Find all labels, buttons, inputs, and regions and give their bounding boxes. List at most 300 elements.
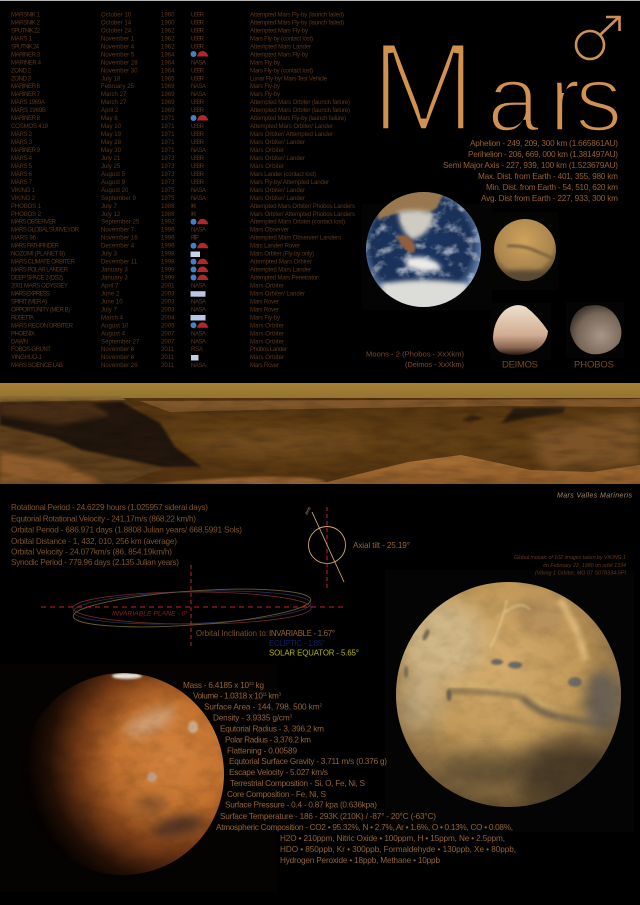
column: agencies: NASA bbox=[191, 91, 207, 98]
column: launch years: 1988 bbox=[161, 203, 175, 210]
stat: atmospheric composition: HDO • 850ppb, Kr • 300ppb, Formaldehyde • 130ppb, Xe • 80ppb, bbox=[280, 845, 516, 854]
column: mission names: FOBOS-GRUNT bbox=[11, 346, 51, 353]
column: mission names: ZOND 3 bbox=[11, 75, 32, 82]
column: mission results: Mars Orbiter bbox=[250, 163, 284, 170]
column: launch dates: May 8 bbox=[101, 115, 118, 122]
column: launch years bbox=[161, 12, 175, 369]
column: launch dates: March 27 bbox=[101, 91, 127, 98]
column: mission names: DAWN bbox=[11, 338, 28, 345]
icon: NASA and JPL logos, Mars Climate Orbiter bbox=[190, 259, 208, 265]
column: mission results: Mars Fly-by bbox=[250, 91, 281, 98]
column: mission results: Attempted Mars Orbiter (launch failure) bbox=[250, 107, 350, 114]
column: mission names: VIKING 1 bbox=[11, 187, 36, 194]
label: Phobos: PHOBOS bbox=[574, 360, 614, 370]
column: mission results: Attempted Mars Penetrator bbox=[250, 274, 318, 282]
column: mission results: Mars Orbiter bbox=[250, 322, 284, 329]
column: agencies: NASA bbox=[191, 362, 207, 369]
column: launch dates: July 18 bbox=[101, 75, 121, 82]
column: launch years: 1969 bbox=[161, 99, 175, 106]
column: launch dates: September 25 bbox=[101, 219, 140, 226]
text block: orbital distances: Aphelion - 249, 209, 300 km (1.665861AU) bbox=[470, 139, 618, 148]
column: launch dates: July 7 bbox=[101, 306, 118, 313]
column: mission results: Attempted Mars Orbiter bbox=[250, 259, 312, 266]
column: mission results: Mars Orbiter/ Lander bbox=[250, 139, 305, 146]
icon: Mars symbol bbox=[576, 17, 620, 59]
column: mission results: Mars Fly-by (contact lost) bbox=[250, 35, 313, 42]
column: mission results: Attempted Mars Fly-by bbox=[250, 27, 309, 34]
column: mission results: Attempted Mars Orbiter/ Lander bbox=[250, 123, 333, 130]
label: invariable plane: INVARIABLE PLANE - 0° bbox=[112, 610, 188, 618]
column: mission names: MARSNIK 2 bbox=[11, 20, 41, 26]
column: mission results: Mars Observer bbox=[250, 227, 289, 234]
column: mission names: MARINER 4 bbox=[11, 59, 42, 66]
column: launch dates: June 10 bbox=[101, 298, 123, 305]
chart: axial tilt bbox=[303, 505, 346, 588]
icon: NASA and JPL logos, Mariner 8 bbox=[190, 115, 208, 121]
column: mission names: MARS 1969A bbox=[11, 99, 46, 106]
column: agencies: NASA bbox=[191, 306, 207, 313]
column: mission results: Mars Orbiter/ Attempted Lander bbox=[250, 131, 333, 138]
image: Earth bbox=[366, 192, 481, 307]
column: launch dates: April 7 bbox=[101, 282, 119, 290]
column: mission names: MARS 7 bbox=[11, 179, 33, 186]
column: launch years: 2007 bbox=[161, 338, 175, 345]
text: number of moons: Moons - 2 (Phobos - XxXkm) bbox=[366, 350, 464, 358]
column: agencies: NASA bbox=[191, 227, 207, 234]
stat: surface pressure: Surface Pressure - 0.4 - 0.87 kpa (0.636kpa) bbox=[225, 801, 377, 810]
column: agencies: USSR bbox=[191, 35, 205, 42]
column: agencies: USSR bbox=[191, 107, 205, 114]
column: mission results: Attempted Mars Lander bbox=[250, 43, 311, 50]
text: number of moons: (Deimos - XxXkm) bbox=[405, 360, 464, 369]
image: panorama of crater bbox=[0, 383, 640, 484]
column: launch years: 2011 bbox=[161, 354, 175, 361]
column: launch years: 2007 bbox=[161, 330, 175, 337]
column: mission names: 2001 MARS ODYSSEY bbox=[11, 282, 68, 290]
column: launch years: 2004 bbox=[161, 314, 175, 321]
caption: global mosaic bbox=[514, 555, 627, 576]
column: launch years: 1971 bbox=[161, 131, 175, 138]
column: agencies: USSR bbox=[191, 155, 205, 162]
stat: mass: Mass - 6.4185 x 10 bbox=[183, 681, 249, 690]
column: agencies: USSR bbox=[191, 131, 205, 138]
stat: volume: km bbox=[266, 692, 279, 701]
column: mission results: Mars Orbiter/ Attempted Phobos Landers bbox=[250, 211, 355, 218]
column: launch years: 1969 bbox=[161, 83, 175, 90]
column: launch dates: May 10 bbox=[101, 123, 122, 130]
stat: density: 3 bbox=[289, 714, 292, 718]
column: launch dates: November 26 bbox=[101, 362, 138, 369]
column: mission names: MARS 3 bbox=[11, 139, 33, 146]
column: launch dates: May 30 bbox=[101, 147, 122, 154]
text block: orbital distances: Semi Major Axis - 227, 939, 100 km (1.523679AU) bbox=[443, 161, 618, 170]
column: launch dates: December 4 bbox=[101, 243, 135, 250]
column: agencies: RSP bbox=[191, 235, 199, 242]
text block: rotation and orbit stats: Rotational Period - 24.6229 hours (1.025957 sideral days) bbox=[11, 503, 208, 512]
stat: volume: 3 bbox=[278, 692, 281, 697]
column: launch dates: August 9 bbox=[101, 179, 126, 186]
stat: volume: Volume - 1.0318 x 10 bbox=[193, 692, 263, 701]
column: mission names: SPUTNIK 22 bbox=[11, 27, 41, 34]
column: mission results: Mars Orbiter/ Lander bbox=[250, 155, 305, 162]
column: mission names: MARINER 7 bbox=[11, 91, 41, 98]
text block: orbital distances bbox=[443, 139, 618, 203]
stat: surface area: Surface Area - 144, 798, 500 km bbox=[204, 703, 320, 712]
column: mission results: Mars Orbiter/ Lander bbox=[250, 195, 305, 202]
column: launch years: 1965 bbox=[161, 75, 175, 82]
column: agencies: USSR bbox=[191, 179, 205, 186]
stat: equatorial radius: Equtorial Radius - 3, 396.2 km bbox=[220, 724, 324, 734]
column: launch years: 1964 bbox=[161, 51, 175, 58]
column: launch dates: July 7 bbox=[101, 203, 118, 210]
column: launch dates: March 4 bbox=[101, 314, 124, 321]
column: agencies: IKI bbox=[191, 211, 196, 218]
column: launch years: 1971 bbox=[161, 115, 175, 122]
column: mission results: Attempted Mars Fly-by bbox=[250, 51, 309, 58]
stat: atmospheric composition: Hydrogen Peroxide • 18ppb, Methane • 10ppb bbox=[280, 856, 440, 865]
text block: orbital inclination: ECLIPTIC - 1.85° bbox=[269, 639, 325, 648]
image: Mars to scale bbox=[494, 219, 556, 281]
column: launch years: 1962 bbox=[161, 35, 175, 42]
column: agencies: NASA bbox=[191, 59, 207, 66]
column: launch dates: February 25 bbox=[101, 83, 134, 90]
table: Mars missions bbox=[11, 12, 355, 369]
title: a bbox=[487, 46, 540, 152]
column: agencies: NASA bbox=[191, 83, 207, 90]
column: mission results: Mars Orbiter bbox=[250, 354, 284, 361]
title: M bbox=[370, 16, 477, 159]
column: mission results: Mars Lander/ Rover bbox=[250, 243, 300, 250]
column: agencies: USSR bbox=[191, 20, 205, 26]
column: launch years: 1999 bbox=[161, 266, 175, 274]
column: launch years: 2011 bbox=[161, 362, 175, 369]
text block: orbital inclination: INVARIABLE - 1.67° bbox=[269, 629, 335, 638]
column: mission results: Mars Fly-by/ Attempted Lander bbox=[250, 179, 329, 186]
column: launch years: 1998 bbox=[161, 251, 175, 258]
column: launch years: 2003 bbox=[161, 290, 175, 298]
icon: NASA and JPL logos, Mariner 3 bbox=[190, 51, 208, 57]
column: launch dates: September 27 bbox=[101, 338, 140, 345]
text: axial tilt value: Axial tilt - 25.19° bbox=[353, 541, 410, 550]
text block: orbital inclination: SOLAR EQUATOR - 5.65° bbox=[269, 648, 359, 658]
icon: ESA logo, Mars Express bbox=[190, 291, 206, 297]
column: mission names: COSMOS 419 bbox=[11, 123, 49, 130]
stat: atmospheric composition: H2O • 210ppm, Nitric Oxide • 100ppm, H • 15ppm, Ne • 2.5ppm, bbox=[280, 834, 505, 843]
column: mission names: OPPORTUNITY (MER B) bbox=[11, 306, 70, 313]
column: launch years: 1969 bbox=[161, 107, 175, 114]
column: mission results: Mars Rover bbox=[250, 362, 279, 369]
text block: rotation and orbit stats: Orbital Period - 686.971 days (1.8808 Julian years/ 668.5991 Sols) bbox=[11, 526, 242, 534]
image: Valles Marineris globe bbox=[396, 582, 621, 807]
column: agencies bbox=[191, 12, 207, 369]
stat: atmospheric composition: Atmospheric Composition - CO2 • 95.32%, N • 2.7%, Ar • 1.6%, O • 0.13%, CO • 0.08%, bbox=[216, 823, 513, 832]
column: launch years: 1973 bbox=[161, 179, 175, 186]
column: agencies: USSR bbox=[191, 12, 205, 18]
column: agencies: IKI bbox=[191, 203, 196, 210]
text block: physical properties bbox=[183, 681, 516, 865]
icon: NASA and JPL logos, Mars Observer bbox=[190, 219, 208, 225]
title: s bbox=[575, 46, 622, 152]
column: mission results: Mars Fly-by bbox=[250, 83, 281, 90]
column: mission results: Mars Fly-by bbox=[250, 59, 281, 66]
column: launch years: 1988 bbox=[161, 211, 175, 218]
column: launch years: 1962 bbox=[161, 43, 175, 50]
stat: polar radius: Polar Radius - 3,376.2 km bbox=[225, 736, 311, 744]
column: mission names: MARS EXPRESS bbox=[11, 290, 50, 298]
column: launch years: 1973 bbox=[161, 163, 175, 170]
image: Deimos bbox=[491, 303, 551, 360]
column: launch dates: November 8 bbox=[101, 346, 135, 353]
column: launch years: 1971 bbox=[161, 147, 175, 154]
column: agencies: USSR bbox=[191, 27, 205, 34]
column: agencies: NASA bbox=[191, 147, 207, 154]
column: launch dates: March 27 bbox=[101, 99, 127, 106]
column: launch dates: November 5 bbox=[101, 51, 135, 58]
column: agencies: NASA bbox=[191, 282, 207, 290]
stat: flattening: Flattening - 0.00589 bbox=[227, 746, 297, 755]
column: launch years: 1973 bbox=[161, 171, 175, 178]
column: mission results: Mars Lander (contact lost) bbox=[250, 171, 316, 178]
column: mission names: MARS OBSERVER bbox=[11, 219, 57, 226]
column: launch years: 1964 bbox=[161, 67, 175, 74]
text block: rotation and orbit stats bbox=[11, 503, 242, 567]
column: agencies: USSR bbox=[191, 123, 205, 130]
column: launch dates: August 20 bbox=[101, 187, 129, 194]
column: launch years: 1998 bbox=[161, 259, 175, 266]
column: agencies: USSR bbox=[191, 67, 205, 74]
column: launch dates: July 12 bbox=[101, 211, 121, 218]
column: mission names: MARS 5 bbox=[11, 163, 33, 170]
column: launch dates: July 3 bbox=[101, 251, 118, 258]
text block: rotation and orbit stats: Orbital Velocity - 24.077km/s (86, 854.19km/h) bbox=[11, 548, 172, 556]
column: mission names: MARS GLOBAL SURVEYOR bbox=[11, 227, 80, 234]
stat: core composition: Core Composition - Fe, Ni, S bbox=[227, 790, 327, 799]
column: mission names: NOZOMI (PLANET B) bbox=[11, 251, 65, 258]
column: mission names: MARS 6 bbox=[11, 171, 33, 178]
column: launch years: 1964 bbox=[161, 59, 175, 66]
text block: orbital inclination bbox=[196, 629, 359, 658]
column: mission names: MARINER 9 bbox=[11, 147, 41, 154]
column: launch years: 1971 bbox=[161, 123, 175, 130]
icon: NASA and JPL logos, Deep Space 2 bbox=[190, 274, 208, 280]
text block: orbital distances: Avg. Dist from Earth - 227, 933, 300 km bbox=[481, 194, 618, 203]
column: agencies: USSR bbox=[191, 43, 205, 50]
column: mission results: Mars Orbiter/ Lander bbox=[250, 187, 305, 194]
column: mission results: Mars Fly-by (contact lost) bbox=[250, 67, 313, 74]
column: mission results: Phobos Lander bbox=[250, 346, 287, 353]
column: launch years: 2003 bbox=[161, 306, 175, 313]
column: launch dates: August 4 bbox=[101, 330, 126, 337]
column: launch years: 1996 bbox=[161, 243, 175, 250]
column: launch years: 1969 bbox=[161, 91, 175, 98]
column: launch dates: November 30 bbox=[101, 67, 138, 74]
column: mission results: Mars Orbiter/ Lander bbox=[250, 290, 305, 298]
column: mission names: MARS POLAR LANDER bbox=[11, 266, 69, 274]
column: launch years: 1960 bbox=[161, 12, 175, 18]
column: mission results: Attempted Mars Observer/ Landers bbox=[250, 235, 341, 242]
column: mission names: MARS 96 bbox=[11, 235, 37, 242]
column: launch dates: November 28 bbox=[101, 59, 138, 66]
column: agencies: NASA bbox=[191, 187, 207, 194]
stat: density: Density - 3.9335 g/cm bbox=[213, 714, 290, 722]
text block: orbital distances: Max. Dist. from Earth - 401, 355, 980 km bbox=[478, 172, 618, 181]
column: launch years: 2005 bbox=[161, 322, 175, 329]
label: Deimos: DEIMOS bbox=[502, 360, 538, 370]
column: mission names: MARINER 3 bbox=[11, 51, 41, 58]
column: launch dates: August 10 bbox=[101, 322, 129, 329]
column: launch dates: July 25 bbox=[101, 163, 121, 170]
column: agencies: USSR bbox=[191, 139, 205, 146]
column: mission names bbox=[11, 12, 80, 369]
column: mission results: Mars Orbiter (Fly-by only) bbox=[250, 251, 314, 258]
column: mission results: Mars Rover bbox=[250, 306, 279, 313]
column: launch years: 1975 bbox=[161, 195, 175, 202]
column: mission names: PHOBOS 2 bbox=[11, 211, 42, 218]
icon: JAXA logo, Nozomi bbox=[190, 252, 200, 257]
column: mission names: MARS 1 bbox=[11, 35, 33, 42]
image: Phobos bbox=[566, 302, 624, 358]
column: launch years: 1992 bbox=[161, 219, 175, 226]
chart: orbital inclination bbox=[41, 565, 343, 648]
label: axis: axis bbox=[303, 505, 312, 515]
column: mission names: MARINER 6 bbox=[11, 83, 41, 90]
stat: terrestrial composition: Terrestrial Composition - Si, O, Fe, Ni, S bbox=[230, 779, 366, 788]
icons: agency logos bbox=[190, 51, 208, 360]
caption: global mosaic: (Viking 1 Orbiter, MG 07 S078334-5PI bbox=[535, 570, 627, 576]
column: mission results: Attempted Mars Orbiter (contact lost) bbox=[250, 219, 345, 226]
column: launch dates: January 3 bbox=[101, 266, 128, 274]
column: launch dates: August 5 bbox=[101, 171, 126, 178]
icon: NASA and JPL logos, Mars Pathfinder bbox=[190, 243, 208, 249]
stat: atmospheric composition bbox=[216, 823, 516, 865]
column: mission names: MARSNIK 1 bbox=[11, 12, 41, 18]
column: launch dates: November 4 bbox=[101, 43, 135, 50]
column: launch dates: December 11 bbox=[101, 259, 138, 266]
text block: rotation and orbit stats: Equtorial Rotational Velocity - 241.17m/s (868.22 km/h) bbox=[11, 514, 196, 524]
stat: escape velocity: Escape Velocity - 5.027 km/s bbox=[229, 768, 328, 777]
icon: ESA logo, Rosetta bbox=[190, 315, 206, 320]
column: agencies: NASA bbox=[191, 330, 207, 337]
column: agencies: USSR bbox=[191, 163, 205, 170]
column: mission results: Mars Orbiter bbox=[250, 330, 284, 337]
title: r bbox=[549, 46, 581, 152]
icon: NASA and JPL logos, Mars Polar Lander bbox=[190, 266, 208, 272]
text block: orbital inclination: Orbital Inclination to: bbox=[196, 629, 268, 638]
column: agencies: USSR bbox=[191, 75, 205, 82]
column: agencies: NASA bbox=[191, 195, 207, 202]
column: launch years: 1996 bbox=[161, 227, 175, 234]
column: mission results: Attempted Mars Fly-by (launch failed) bbox=[250, 20, 344, 26]
column: launch dates: July 21 bbox=[101, 155, 121, 162]
column: launch dates: May 28 bbox=[101, 139, 122, 146]
column: mission names: ROSETTA bbox=[11, 314, 35, 321]
column: agencies: NASA bbox=[191, 338, 207, 345]
column: mission results: Attempted Mars Orbiter/ Phobos Landers bbox=[250, 203, 355, 210]
caption: panorama: Mars Valles Marineris bbox=[557, 492, 632, 500]
column: launch dates: November 8 bbox=[101, 354, 135, 361]
column: mission names: PHOBOS 1 bbox=[11, 203, 42, 210]
column: launch dates: October 10 bbox=[101, 12, 132, 18]
column: launch dates: October 24 bbox=[101, 27, 132, 34]
column: mission names: MARS SCIENCE LAB bbox=[11, 362, 63, 369]
column: agencies: USSR bbox=[191, 171, 205, 178]
column: launch dates: November 16 bbox=[101, 235, 138, 242]
column: launch years: 1973 bbox=[161, 155, 175, 162]
column: launch dates: January 3 bbox=[101, 274, 128, 282]
column: mission results: Attempted Mars Lander bbox=[250, 266, 311, 274]
column: mission results: Mars Fly-by bbox=[250, 314, 281, 321]
stat: surface area: 2 bbox=[319, 703, 322, 708]
column: mission names: ZOND 2 bbox=[11, 67, 32, 74]
caption: global mosaic: on February 22, 1980 on orbit 1334 bbox=[543, 563, 626, 569]
text block: rotation and orbit stats: Synodic Period - 779.96 days (2.135 Julian years) bbox=[11, 558, 179, 567]
column: launch dates: June 2 bbox=[101, 290, 120, 298]
column: launch years: 1971 bbox=[161, 139, 175, 146]
caption: global mosaic: Global mosaic of 102 images taken by VIKING 1 bbox=[514, 555, 626, 561]
column: mission results: Attempted Mars Orbiter (launch failure) bbox=[250, 99, 350, 106]
column: mission results: Attempted Mars Fly-by (launch failed) bbox=[250, 12, 344, 18]
column: agencies: RSA bbox=[191, 346, 204, 353]
column: launch dates bbox=[101, 12, 140, 369]
stat: surface temperature: Surface Temperature - 186 - 293K (210K) / -87° - 20°C (-63°C) bbox=[220, 812, 436, 821]
column: mission results: Mars Rover bbox=[250, 298, 279, 305]
column: agencies: NASA bbox=[191, 298, 207, 305]
column: mission names: SPUTNIK 24 bbox=[11, 43, 40, 50]
column: launch years: 1975 bbox=[161, 187, 175, 194]
top edge strip bbox=[0, 0, 640, 1]
column: mission names: DEEP SPACE 2 (DS2) bbox=[11, 274, 63, 282]
column: mission results: Mars Orbiter bbox=[250, 338, 284, 345]
column: launch years: 1999 bbox=[161, 274, 175, 282]
column: launch dates: April 2 bbox=[101, 107, 119, 114]
column: mission results: Mars Orbiter bbox=[250, 282, 284, 290]
column: launch years: 2011 bbox=[161, 346, 175, 353]
column: launch dates: November 7 bbox=[101, 227, 135, 234]
column: mission names: MARS RECON ORBITER bbox=[11, 322, 74, 329]
text block: orbital distances: Min. Dist. from Earth - 54, 510, 620 km bbox=[486, 183, 618, 192]
column: mission results: Attempted Mars Fly-by (launch failure) bbox=[250, 115, 346, 122]
column: mission results: Lunar Fly-by/ Mars Test Vehicle bbox=[250, 75, 328, 82]
column: launch years: 1996 bbox=[161, 235, 175, 242]
text block: orbital distances: Perihelion - 206, 669, 000 km (1.381497AU) bbox=[468, 150, 618, 159]
stat: surface gravity: Equtorial Surface Gravity - 3.711 m/s (0.376 g) bbox=[229, 757, 387, 766]
column: agencies: USSR bbox=[191, 99, 205, 106]
icon: CNSA logo, Yinghuo-1 bbox=[191, 355, 198, 360]
column: mission names: PHOENIX bbox=[11, 330, 35, 337]
column: mission names: MARS 4 bbox=[11, 155, 33, 162]
column: mission names: SPIRIT (MER A) bbox=[11, 298, 47, 305]
column: launch dates: October 14 bbox=[101, 20, 132, 26]
column: launch dates: November 1 bbox=[101, 35, 135, 42]
column: launch years: 1962 bbox=[161, 27, 175, 34]
column: mission names: MARS PATHFINDER bbox=[11, 243, 60, 250]
stat: mass: kg bbox=[253, 681, 264, 690]
text block: rotation and orbit stats: Orbital Distance - 1, 432, 010, 256 km (average) bbox=[11, 537, 177, 546]
column: mission names: MARS 2 bbox=[11, 131, 33, 138]
icon: NASA and JPL logos, Mars Recon Orbiter bbox=[190, 322, 208, 328]
stat: mass: 23 bbox=[249, 681, 254, 686]
column: launch dates: May 19 bbox=[101, 131, 122, 138]
image: Mars globe, lit from right bbox=[28, 673, 224, 875]
column: mission names: VIKING 2 bbox=[11, 195, 36, 202]
stat: volume: 11 bbox=[263, 692, 267, 697]
column: launch years: 2001 bbox=[161, 282, 175, 290]
column: mission names: MARINER 8 bbox=[11, 115, 41, 122]
column: launch dates: September 9 bbox=[101, 195, 137, 202]
text: number of moons bbox=[366, 350, 464, 369]
column: mission names: YINGHUO-1 bbox=[11, 354, 43, 361]
column: launch years: 1960 bbox=[161, 20, 175, 26]
